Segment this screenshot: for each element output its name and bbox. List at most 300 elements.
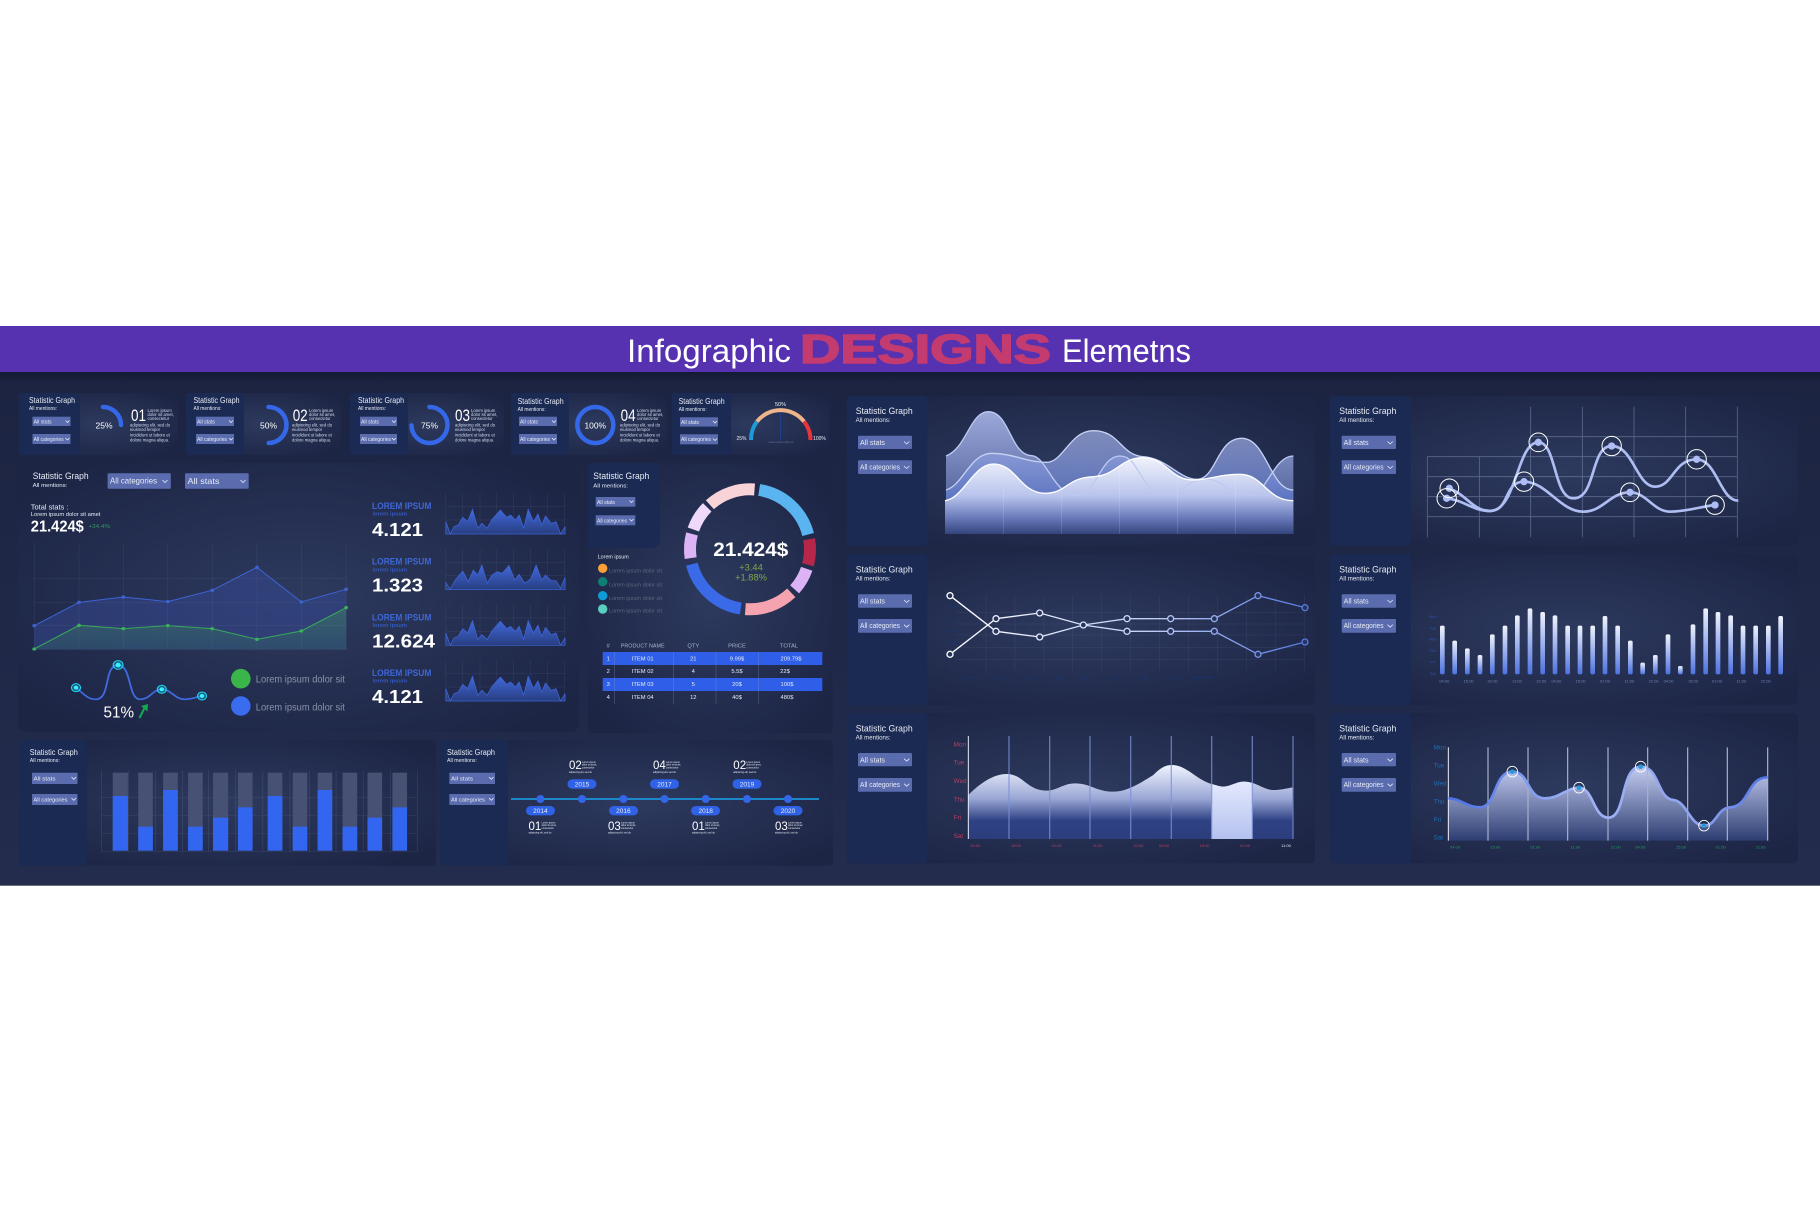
area chart: 15:00: [1200, 843, 1210, 848]
sidebar labels: All categories: [1344, 780, 1384, 789]
curve chart: Thu: [1434, 799, 1445, 806]
sidebar labels: All stats: [1344, 438, 1369, 447]
area chart: Sat: [954, 833, 963, 840]
panel: gauge: [672, 393, 829, 455]
donut 50%: 50%: [260, 421, 277, 431]
bars: 01:00: [1712, 679, 1723, 684]
step 01 text: eiusmod tempor: [130, 427, 161, 432]
product table: TOTAL: [780, 644, 799, 650]
sidebar labels: All mentions:: [856, 418, 891, 424]
timeline notes: Lorem ipsum: [788, 822, 802, 824]
sidebar labels: All mentions:: [856, 736, 891, 742]
timeline notes: 03: [775, 821, 788, 833]
legend: Lorem ipsum dolor sit: [256, 674, 345, 686]
total stats figure: 21.424$: [31, 518, 84, 536]
sidebar labels: Statistic Graph: [856, 565, 913, 576]
sidebar labels: All categories: [1344, 462, 1384, 472]
total stats figure: [31, 502, 110, 536]
timeline notes: consectetur: [582, 766, 595, 769]
step 04 text: eiusmod tempor: [620, 427, 651, 432]
line chart: Sat: [949, 665, 957, 670]
area chart: 04:00: [1159, 843, 1170, 848]
year pills: 2016: [616, 808, 631, 815]
title banner: DESIGNS: [800, 326, 1051, 372]
legend: Lorem ipsum: [598, 555, 629, 561]
product table: 100$: [781, 682, 794, 688]
legend: Lorem ipsum dolor sit: [609, 582, 662, 588]
sidebar labels: All categories: [520, 437, 550, 443]
sidebar labels: All mentions:: [1339, 418, 1375, 424]
sidebar labels: All categories: [860, 621, 900, 630]
bars: Sat: [1430, 671, 1437, 676]
gauge chart: [736, 402, 826, 444]
legend: [598, 555, 662, 615]
step 01 text: 01: [131, 407, 146, 425]
product table: 209.79$: [781, 656, 802, 662]
step 04 text: dolor sit amet,: [637, 412, 663, 417]
timeline notes: dolor sit amet,: [542, 824, 557, 827]
sidebar labels: All stats: [1344, 755, 1369, 764]
sidebar labels: All categories: [361, 437, 391, 443]
panel: thin bar chart: [1330, 554, 1798, 705]
bars: Tue: [1429, 626, 1437, 631]
sidebar labels: All stats: [681, 420, 699, 426]
line chart: Tue: [949, 617, 957, 622]
area chart: 01:00: [1052, 843, 1062, 848]
curve chart: 04:00: [1635, 845, 1646, 850]
sidebar labels: Statistic Graph: [358, 396, 404, 405]
line chart: August: [1167, 675, 1182, 680]
step 03 text: adipiscing elit, sed do: [455, 422, 496, 427]
sidebar labels: All categories: [34, 437, 64, 443]
sidebar labels: All mentions:: [1339, 736, 1375, 742]
panel: total stats: [18, 463, 579, 732]
area chart: 01:00: [1240, 843, 1251, 848]
area chart: [945, 412, 1293, 534]
sidebar labels: All categories: [860, 780, 900, 789]
timeline notes: [528, 760, 803, 834]
step 02 text: eiusmod tempor: [292, 427, 323, 432]
line chart: [947, 593, 1308, 680]
timeline notes: Lorem ipsum: [582, 761, 596, 764]
sidebar labels: All categories: [597, 518, 627, 524]
sidebar labels: [29, 396, 75, 444]
curve chart: 01:00: [1716, 845, 1726, 850]
sidebar labels: Statistic Graph: [447, 748, 495, 757]
total stats figure: Lorem ipsum dolor sit amet: [31, 512, 101, 518]
timeline notes: dolor sit amet,: [582, 764, 597, 767]
area chart: Mon: [954, 741, 966, 748]
donut 75%: [412, 407, 448, 443]
curve chart: 15:00: [1676, 845, 1687, 850]
step 01 text: Lorem ipsum: [148, 408, 172, 413]
area chart: Fri: [954, 815, 961, 822]
sidebar labels: All mentions:: [447, 758, 477, 764]
curve chart: [1427, 407, 1738, 537]
step 04 text: 04: [621, 407, 636, 425]
timeline notes: consectetur: [621, 827, 634, 830]
curve chart: Fri: [1434, 817, 1441, 824]
ring chart centre value: +3.44: [739, 562, 763, 572]
line chart: June: [1110, 675, 1120, 680]
line chart: January: [962, 675, 979, 680]
sidebar labels: All stats: [860, 438, 885, 447]
bars: Fri: [1430, 659, 1435, 664]
step 02 text: incididunt ut labore et: [292, 432, 333, 437]
sidebar labels: All stats: [34, 777, 56, 783]
bars: 04:00: [1551, 679, 1562, 684]
legend: Lorem ipsum dolor sit: [609, 609, 662, 615]
metric row 3: lorem ipsum: [372, 623, 407, 629]
ring chart centre value: +1.88%: [735, 572, 767, 582]
gauge chart: Lorem ipsum dolor sit: [769, 440, 794, 444]
area chart: Thu: [954, 796, 965, 803]
sidebar labels: All mentions:: [30, 758, 60, 764]
timeline notes: adipiscing elit, sed do: [692, 832, 716, 834]
step 01 text: incididunt ut labore et: [130, 432, 171, 437]
product table: 5: [692, 682, 695, 688]
sidebar labels: All mentions:: [29, 406, 57, 412]
curve chart: Wed: [1434, 781, 1447, 788]
bars: [101, 771, 417, 852]
timeline notes: 01: [528, 821, 541, 833]
donut 100%: [577, 407, 613, 443]
step 01 text: [130, 407, 174, 442]
heading and filters: All stats: [188, 476, 220, 486]
metric row 4: 4.121: [372, 687, 423, 707]
sidebar labels: [1339, 406, 1396, 474]
metric row 2: [372, 549, 565, 596]
timeline notes: dolor sit amet,: [666, 764, 681, 767]
sidebar labels: [447, 748, 495, 805]
sidebar labels: All stats: [597, 500, 615, 506]
sidebar labels: Statistic Graph: [679, 397, 725, 406]
sidebar labels: All categories: [860, 462, 900, 472]
step 04 text: [620, 407, 663, 442]
timeline notes: 03: [608, 821, 621, 833]
panel: progress 50%: [186, 393, 341, 455]
step 02 text: dolor sit amet,: [309, 412, 335, 417]
sidebar labels: Statistic Graph: [856, 406, 913, 417]
timeline notes: adipiscing elit, sed do: [733, 771, 757, 774]
product table: [603, 644, 822, 704]
sidebar labels: All stats: [361, 419, 379, 425]
51% label with arrow: [104, 704, 148, 722]
sidebar labels: Statistic Graph: [1339, 406, 1396, 417]
product table: 3: [607, 682, 610, 688]
51% label with arrow: 51%: [104, 704, 134, 722]
step 02 text: consectetur: [309, 416, 331, 421]
bars: 22:00: [1761, 679, 1771, 684]
heading and filters: [33, 471, 249, 489]
bars: Thu: [1429, 648, 1436, 653]
sidebar labels: All mentions:: [1339, 577, 1375, 583]
step 02 text: adipiscing elit, sed do: [292, 422, 333, 427]
ring chart centre value: [713, 540, 789, 582]
sidebar labels: [856, 406, 913, 474]
line chart: April: [1053, 675, 1062, 680]
small wave chart: [71, 661, 207, 700]
panel: progress 100%: [511, 393, 667, 455]
legend: Lorem ipsum dolor sit: [609, 596, 662, 602]
bars: Wed: [1429, 637, 1437, 642]
step 03 text: incididunt ut labore et: [455, 432, 496, 437]
panel: progress 25%: [19, 393, 178, 455]
step 04 text: adipiscing elit, sed do: [620, 422, 661, 427]
year pills: 2019: [740, 781, 755, 788]
metric row 2: LOREM IPSUM: [372, 557, 431, 567]
panel: timeline: [440, 740, 833, 866]
product table: ITEM 04: [632, 695, 654, 701]
line chart: Fri: [950, 653, 955, 658]
product table: 40$: [732, 695, 743, 701]
line chart: Wed: [948, 629, 958, 634]
bars: 11:00: [1624, 679, 1635, 684]
timeline notes: consectetur: [705, 827, 718, 830]
year pills: 2017: [657, 781, 672, 788]
sidebar labels: All mentions:: [679, 407, 707, 413]
product table: 22$: [780, 669, 791, 675]
product table: 21: [690, 656, 697, 662]
bars: 01:00: [1600, 679, 1611, 684]
sidebar labels: All mentions:: [358, 406, 386, 412]
sidebar labels: All mentions:: [194, 406, 222, 412]
timeline notes: consectetur: [542, 827, 554, 830]
timeline axis: [511, 795, 819, 803]
area chart: Wed: [954, 778, 967, 785]
area chart: [954, 736, 1293, 848]
curve chart: Tue: [1434, 763, 1445, 770]
step 03 text: consectetur: [471, 416, 493, 421]
panel: ring chart and table: [588, 463, 835, 733]
sidebar labels: Statistic Graph: [194, 396, 240, 405]
sidebar labels: All categories: [1344, 621, 1384, 630]
timeline notes: adipiscing elit, sed do: [608, 832, 632, 834]
donut 100%: 100%: [584, 421, 606, 431]
line chart: January: [993, 675, 1011, 680]
sidebar labels: Statistic Graph: [29, 396, 75, 405]
sidebar labels: [856, 723, 913, 792]
sidebar labels: All categories: [451, 798, 485, 804]
line chart: March: [1024, 675, 1038, 680]
line chart: [32, 543, 348, 651]
curve chart: 01:00: [1530, 845, 1541, 850]
step 04 text: dolore magna aliqua.: [620, 437, 659, 442]
curve chart: 22:00: [1611, 845, 1621, 850]
heading and filters: All categories: [110, 476, 157, 486]
heading and filters: Statistic Graph: [33, 471, 89, 481]
curve chart: 15:00: [1490, 845, 1501, 850]
sidebar labels: Statistic Graph: [30, 748, 78, 757]
sidebar labels: All mentions:: [593, 484, 628, 490]
sidebar labels: [856, 565, 913, 633]
timeline notes: dolor sit amet,: [705, 824, 720, 827]
metric row 4: [372, 660, 565, 707]
timeline notes: adipiscing elit, sed do: [775, 832, 799, 834]
step 02 text: Lorem ipsum: [309, 408, 334, 413]
sidebar labels: All categories: [34, 798, 68, 804]
step 03 text: dolor sit amet,: [471, 412, 497, 417]
step 02 text: [292, 407, 335, 442]
sidebar labels: [518, 397, 564, 444]
product table: ITEM 02: [632, 669, 654, 675]
bars: [1429, 608, 1783, 684]
timeline notes: 02: [733, 760, 746, 772]
legend: [231, 669, 345, 716]
sidebar labels: All stats: [1344, 597, 1369, 606]
timeline notes: dolor sit amet,: [621, 824, 636, 827]
title banner: Elemetns: [1062, 333, 1191, 369]
sidebar labels: All categories: [681, 437, 711, 443]
bars: 01:00: [1488, 679, 1498, 684]
metric row 4: lorem ipsum: [372, 679, 407, 685]
curve chart: 04:00: [1450, 845, 1461, 850]
product table: 12: [690, 695, 697, 701]
curve chart: [1434, 744, 1768, 850]
ring chart: [665, 464, 835, 634]
timeline notes: Lorem ipsum: [666, 761, 680, 764]
product table: PRODUCT NAME: [621, 644, 665, 650]
metric row 2: 1.323: [372, 576, 423, 596]
timeline notes: Lorem ipsum: [621, 822, 635, 824]
timeline notes: adipiscing elit, sed do: [528, 832, 552, 834]
product table: #: [607, 644, 611, 650]
bars: 11:00: [1512, 679, 1523, 684]
curve chart: 11:00: [1570, 845, 1581, 850]
dashboard background: [0, 372, 1820, 886]
legend: Lorem ipsum dolor sit: [609, 568, 662, 574]
panel: highlighted area curve: [1330, 713, 1798, 863]
donut 75%: 75%: [421, 421, 438, 431]
metric row 3: 12.624: [372, 631, 435, 651]
area chart: 11:00: [1281, 843, 1292, 848]
ring chart centre value: 21.424$: [713, 540, 789, 561]
sidebar labels: Statistic Graph: [518, 397, 564, 406]
year pills: 2015: [575, 781, 590, 788]
sidebar labels: [358, 396, 404, 444]
panel: layered area chart: [847, 396, 1315, 546]
year pills: 2020: [781, 808, 796, 815]
sidebar labels: [593, 471, 649, 525]
timeline notes: consectetur: [666, 766, 679, 769]
sidebar labels: All stats: [34, 419, 52, 425]
product table: 9.99$: [730, 656, 745, 662]
timeline notes: 02: [569, 760, 582, 772]
curve chart: 11:00: [1756, 845, 1766, 850]
heading and filters: All mentions:: [33, 483, 68, 489]
panel: stacked bar chart: [19, 740, 436, 866]
timeline notes: consectetur: [788, 827, 801, 830]
metric row 4: LOREM IPSUM: [372, 668, 431, 678]
product table: 20$: [732, 682, 743, 688]
product table: 4: [692, 669, 696, 675]
year pills: 2014: [533, 808, 548, 815]
product table: QTY: [687, 644, 699, 650]
step 04 text: consectetur: [637, 416, 659, 421]
product table: ITEM 01: [632, 656, 654, 662]
sidebar labels: Statistic Graph: [1339, 723, 1396, 734]
sidebar labels: All stats: [451, 777, 473, 783]
area chart: 22:00: [1133, 843, 1144, 848]
donut 50%: [250, 407, 286, 443]
title banner: Infographic: [627, 333, 791, 369]
product table: 5.5$: [731, 669, 743, 675]
step 02 text: dolore magna aliqua.: [292, 437, 331, 442]
gauge chart: 50%: [775, 402, 786, 408]
sidebar labels: Statistic Graph: [1339, 565, 1396, 576]
product table: PRICE: [728, 644, 746, 650]
step 01 text: dolor sit amet,: [148, 412, 174, 417]
timeline notes: consectetur: [746, 766, 759, 769]
step 03 text: 03: [455, 407, 470, 425]
legend: Lorem ipsum dolor sit: [256, 702, 345, 713]
sidebar labels: All stats: [520, 419, 538, 425]
area chart: Tue: [954, 760, 965, 767]
timeline notes: adipiscing elit, sed do: [653, 771, 677, 774]
step 01 text: dolore magna aliqua.: [130, 437, 169, 442]
product table: 480$: [781, 695, 794, 701]
bars: 04:00: [1439, 679, 1450, 684]
timeline notes: 04: [653, 760, 666, 772]
timeline notes: 01: [692, 821, 705, 833]
panel: progress 75%: [350, 393, 504, 455]
area chart: 15:00: [1011, 843, 1022, 848]
product table: ITEM 03: [632, 682, 654, 688]
sidebar labels: [1339, 565, 1396, 633]
bars: 11:00: [1736, 679, 1747, 684]
line chart: September: [1190, 675, 1213, 680]
sidebar labels: [30, 748, 78, 805]
step 04 text: incididunt ut labore et: [620, 432, 661, 437]
donut 25%: 25%: [96, 421, 113, 431]
metric row 2: lorem ipsum: [372, 567, 407, 573]
line chart: Mon: [948, 604, 958, 609]
sidebar labels: All stats: [860, 755, 885, 764]
step 03 text: Lorem ipsum: [471, 408, 496, 413]
step 01 text: consectetur: [148, 416, 170, 421]
title banner: [0, 326, 1820, 372]
panel: time area chart: [847, 713, 1315, 863]
sidebar labels: All stats: [197, 419, 215, 425]
step 02 text: 02: [293, 407, 308, 425]
area chart: 04:00: [970, 843, 981, 848]
step 04 text: Lorem ipsum: [637, 408, 662, 413]
bars: 04:00: [1664, 679, 1674, 684]
year pills: [526, 779, 802, 815]
metric row 1: [372, 493, 565, 540]
curve chart: Sat: [1434, 835, 1443, 842]
sidebar labels: Statistic Graph: [593, 471, 649, 481]
bars: 22:00: [1536, 679, 1547, 684]
gauge chart: 100%: [813, 436, 826, 442]
line chart: Thu: [949, 641, 957, 646]
donut 25%: [85, 407, 121, 443]
gauge chart: 25%: [736, 436, 747, 442]
panel: dual curve chart: [1330, 396, 1798, 546]
sidebar labels: All mentions:: [518, 407, 546, 413]
metric row 3: [372, 605, 565, 651]
sidebar labels: All stats: [860, 597, 885, 606]
bars: 22:00: [1649, 679, 1659, 684]
product table: 4: [607, 695, 611, 701]
step 01 text: adipiscing elit, sed do: [130, 422, 171, 427]
metric row 1: 4.121: [372, 520, 423, 540]
bars: 15:00: [1688, 679, 1699, 684]
sidebar labels: [194, 396, 240, 444]
area chart: 11:00: [1093, 843, 1103, 848]
sidebar labels: All categories: [197, 437, 227, 443]
curve chart: Mon: [1434, 744, 1446, 751]
